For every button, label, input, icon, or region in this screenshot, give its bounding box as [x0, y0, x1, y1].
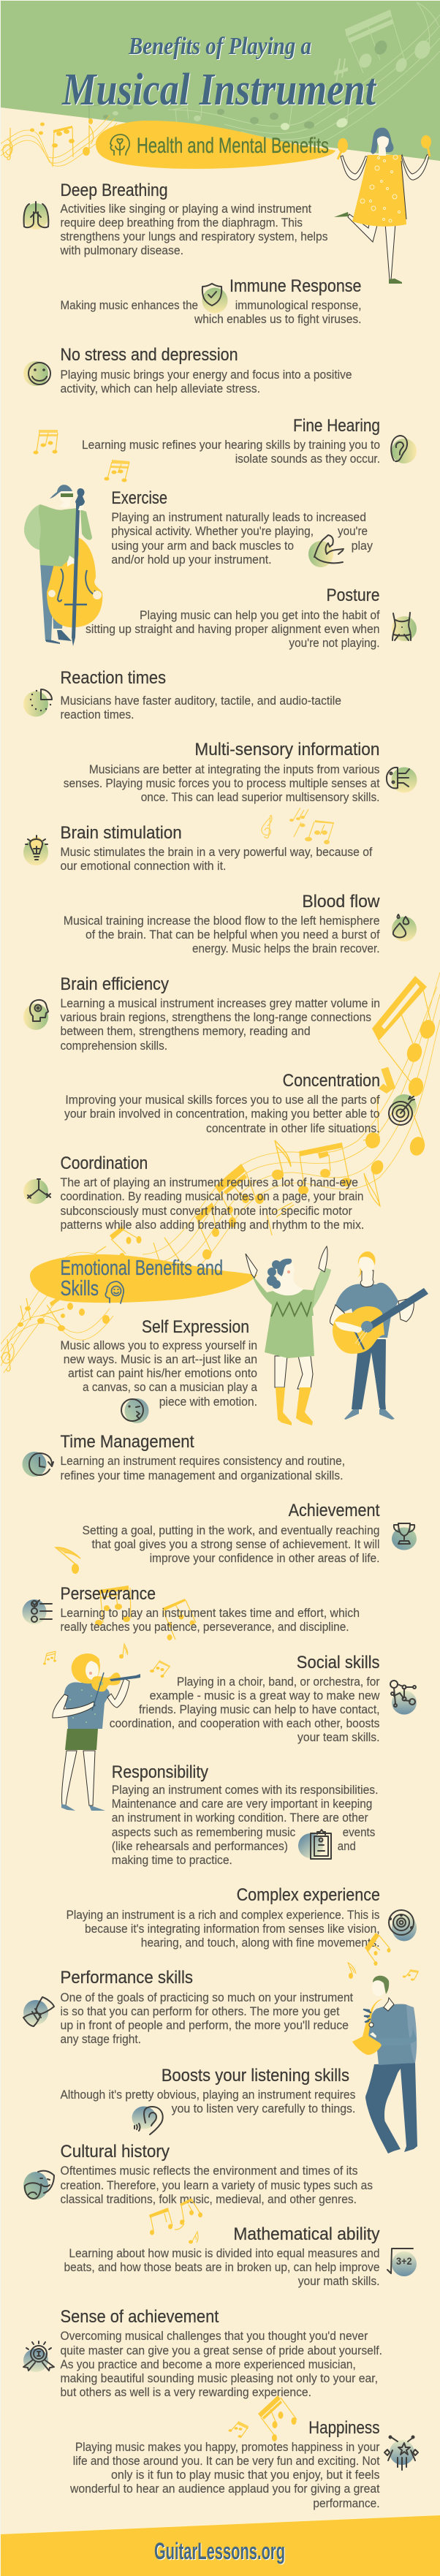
body text [64, 2247, 380, 2288]
body text [60, 2164, 373, 2206]
heading: Performance skills [60, 1968, 193, 1988]
panel: fine hearing [82, 416, 417, 466]
body text: Maintenance and care are very important in keeping [112, 1797, 372, 1811]
title [61, 33, 376, 115]
body text: subconsciously must convert that note into specific motor [60, 1205, 352, 1218]
heading: Blood flow [302, 892, 380, 912]
icon: clipboard [293, 1828, 331, 1863]
body text [60, 299, 361, 326]
panel: performance skills [23, 1968, 353, 2046]
panel: multi-sensory information [64, 740, 417, 804]
panel: reaction times [23, 668, 341, 721]
panel: social skills [110, 1653, 417, 1744]
icon: drops [392, 914, 417, 942]
body text: artist can paint his/her emotions onto [68, 1367, 257, 1380]
body text [60, 1455, 345, 1482]
body text: friends. Playing music can help to have contact, [139, 1703, 380, 1716]
heading: Reaction times [60, 668, 166, 688]
body text: sitting up straight and having proper alignment even when [86, 623, 380, 636]
title: Musical Instrument [61, 65, 376, 115]
body text: new ways. Music is an art--just like an [64, 1353, 257, 1366]
body text: Oftentimes music reflects the environment and times of its [60, 2164, 358, 2178]
banner text: Skills [60, 1277, 99, 1300]
heading: Perseverance [60, 1584, 156, 1604]
body text: you're not playing. [289, 637, 380, 650]
heading: Immune Response [230, 276, 361, 296]
illustration: violinist [53, 1653, 140, 1811]
body text: wonderful to hear an audience applaud you for giving a great [69, 2482, 380, 2496]
body text: physical activity. Whether you're playing, [111, 525, 314, 538]
icon: square root [387, 2249, 417, 2276]
body text: with pulmonary disease. [60, 244, 183, 257]
panel: immune response [60, 276, 361, 326]
icon: ear with sound [132, 2107, 163, 2134]
panel: self expression [60, 1317, 258, 1423]
body text: you're [338, 525, 368, 538]
body text: of the brain. That can be helpful when you need a burst of [86, 928, 380, 942]
icon: three-way branch [23, 1179, 50, 1204]
body text [82, 439, 380, 466]
icon: shield [202, 284, 228, 313]
body text: improve your confidence in other areas of life. [150, 1552, 380, 1565]
body text: Playing music brings your energy and focus into a positive [60, 368, 352, 382]
body text: concentrate in other life situations. [206, 1122, 380, 1135]
body text [111, 511, 373, 567]
heading: Mathematical ability [233, 2224, 380, 2244]
body text: an instrument in working condition. There are other [112, 1811, 368, 1825]
decorative notes: beamed pairs behind perseverance [95, 1586, 196, 1640]
body text: Overcoming musical challenges that you thought you'd never [60, 2330, 368, 2343]
body text [60, 1339, 258, 1409]
icon: ear [391, 436, 417, 463]
heading: Self Expression [142, 1317, 249, 1337]
body text [60, 2088, 355, 2115]
body text: making beautiful sounding music pleasing not only to your ear, [60, 2372, 378, 2385]
body text: your brain involved in concentration, making you better able to [64, 1107, 380, 1121]
decorative notes: above mathematical ability [149, 2198, 202, 2244]
body text: and [338, 1840, 356, 1853]
banner: health and mental benefits [96, 121, 335, 169]
heading: Happiness [308, 2418, 380, 2438]
body text [60, 202, 328, 257]
panel: blood flow [64, 892, 417, 955]
icon: stopwatch [23, 689, 52, 716]
panel: deep breathing [23, 181, 327, 257]
body text: Setting a goal, putting in the work, and eventually reaching [82, 1524, 380, 1537]
body text: making time to practice. [112, 1854, 232, 1867]
heading: Complex experience [237, 1885, 380, 1905]
body text [112, 1784, 379, 1867]
body text: Playing music makes you happy, promotes happiness in your [75, 2441, 380, 2454]
body text: Playing an instrument naturally leads to increased [111, 511, 366, 524]
heading: Time Management [60, 1432, 194, 1452]
body text: Playing music can help you get into the habit of [140, 609, 380, 622]
body text: coordination. By reading musical notes on a page, your brain [60, 1190, 364, 1203]
title: Benefits of Playing a [128, 33, 311, 60]
body text [64, 914, 380, 955]
body text [69, 2441, 380, 2510]
body text [60, 1176, 364, 1232]
body text: Although it's pretty obvious, playing an instrument requires [60, 2088, 355, 2102]
body text: between them, strengthens memory, reading and [60, 1025, 311, 1038]
body text: your math skills. [298, 2275, 380, 2288]
icon: flexed arm [308, 535, 344, 567]
decorative notes under banner [0, 1296, 113, 1371]
icon: kissing face [121, 1398, 149, 1423]
heading: Deep Breathing [60, 181, 168, 200]
body text: that goal gives you a strong sense of achievement. It will [92, 1538, 380, 1551]
body text: Music allows you to express yourself in [60, 1339, 257, 1352]
heading: Social skills [297, 1653, 380, 1672]
icon: fireworks [384, 2436, 418, 2470]
panel: perseverance [22, 1584, 360, 1634]
icon: waist [392, 613, 417, 641]
body text: up in front of people and perform, the more you'll reduce [60, 2019, 349, 2032]
body text: activity, which can help alleviate stress. [60, 382, 260, 395]
heading: Brain stimulation [60, 823, 182, 843]
body text: creation. Therefore, you learn a variety of music types such as [60, 2179, 373, 2192]
panel: posture [86, 586, 417, 650]
body text: quite master can give you a great sense of pride about yourself. [60, 2344, 382, 2357]
body text: Learning to play an instrument takes time and effort, which [60, 1607, 360, 1620]
illustration: guitar man [330, 1251, 428, 1420]
body text: Playing an instrument comes with its responsibilities. [112, 1784, 379, 1797]
icon: network [390, 1681, 417, 1715]
panel: boosts your listening skills [60, 2066, 355, 2134]
body text: Musicians have faster auditory, tactile, and audio-tactile [60, 694, 341, 708]
body text: Learning a musical instrument increases grey matter volume in [60, 997, 380, 1010]
icon: clock [22, 1452, 53, 1477]
body text: patterns while also adding breathing and rhythm to the mix. [60, 1219, 364, 1232]
banner: health and mental benefits: Health and Mental Benefits [137, 134, 329, 158]
heading: No stress and depression [60, 345, 238, 365]
body text: senses. Playing music forces you to process multiple senses at [64, 777, 380, 790]
panel: coordination [23, 1153, 364, 1232]
icon: trophy [392, 1523, 417, 1550]
heading: Exercise [111, 488, 167, 508]
panel: time management [22, 1432, 345, 1482]
panel: happiness [69, 2418, 418, 2510]
heading: Coordination [60, 1153, 148, 1173]
panel: concentration [64, 1071, 417, 1135]
illustration: double bass player [24, 485, 102, 646]
heading: Brain efficiency [60, 974, 169, 994]
body text: One of the goals of practicing so much on your instrument [60, 1991, 353, 2004]
decorative notes: above saxophonist [348, 1933, 419, 1981]
green header background [1, 1, 440, 161]
body text: any stage fright. [60, 2033, 141, 2046]
panel: no stress and depression [23, 345, 352, 395]
decorative note: small beamed 2 [104, 460, 129, 482]
banner text [60, 1257, 223, 1300]
heading: Boosts your listening skills [162, 2066, 349, 2086]
body text [60, 846, 373, 873]
banner: emotional benefits and skills [30, 1254, 257, 1303]
panel: mathematical ability [64, 2224, 417, 2288]
body text [60, 2330, 382, 2399]
decorative yellow notes, left of banner [0, 115, 117, 167]
body text [60, 997, 380, 1053]
panel: achievement [82, 1501, 417, 1565]
body text: a canvas, so can a musician play a [83, 1381, 258, 1394]
illustration: woman with maracas [334, 128, 431, 284]
panel: cultural history [23, 2142, 373, 2206]
footer band [0, 2515, 440, 2576]
body text: piece with emotion. [159, 1395, 257, 1409]
body text [60, 1991, 353, 2046]
heading: Sense of achievement [60, 2307, 219, 2327]
icon: lungs [23, 202, 48, 230]
icon: target with arrow [389, 1094, 417, 1125]
body text: Making music enhances the [60, 299, 198, 312]
body text [86, 609, 380, 650]
body text [67, 1909, 379, 1950]
body text: example - music is a great way to make new [150, 1689, 380, 1702]
body text: our emotional connection with it. [60, 860, 226, 873]
icon: smiley [23, 361, 50, 386]
body text: once. This can lead superior multisensory skills. [141, 791, 379, 804]
heading: Fine Hearing [293, 416, 380, 436]
panel: responsibility [112, 1762, 379, 1867]
heading: Achievement [289, 1501, 380, 1520]
illustration: dancing woman [246, 1246, 331, 1425]
body text: events [343, 1826, 375, 1839]
decorative notes: clef and beamed [262, 808, 334, 844]
heading: Posture [326, 586, 380, 605]
body text: comprehension skills. [60, 1039, 167, 1053]
body text [60, 368, 352, 395]
body text: The art of playing an instrument requires a lot of hand-eye [60, 1176, 358, 1189]
icon: square root: 3+2 [396, 2255, 412, 2267]
body text: strengthens your lungs and respiratory system, helps [60, 230, 327, 243]
body text: aspects such as remembering music [112, 1826, 295, 1839]
icon: theatre masks [23, 2171, 54, 2200]
heading: Responsibility [112, 1762, 208, 1782]
body text: Music stimulates the brain in a very powerful way, because of [60, 846, 373, 859]
body text: Activities like singing or playing a wind instrument [60, 202, 311, 216]
body text: is so that you can perform for others. The more you get [60, 2005, 340, 2018]
body text [60, 694, 341, 721]
heading: Concentration [283, 1071, 380, 1091]
body text: you to listen very carefully to things. [172, 2102, 355, 2115]
body text: reaction times. [60, 708, 134, 721]
icon: orbit [389, 1910, 417, 1942]
icon: rosette [23, 2341, 54, 2372]
body text: classical traditions, folk music, medieval, and other genres. [60, 2193, 357, 2206]
icon: head with gear [23, 1000, 48, 1030]
heading: Multi-sensory information [194, 740, 380, 759]
body text: Learning music refines your hearing skills by training you to [82, 439, 380, 452]
panel: sense of achievement [23, 2307, 382, 2399]
body text: only is it fun to play music that you enjoy, but it feels [111, 2469, 380, 2482]
body text: As you practice and become a more experienced musician, [60, 2358, 356, 2371]
body text: immunological response, [235, 299, 361, 312]
body text: Musicians are better at integrating the inputs from various [89, 763, 379, 776]
banner text: Emotional Benefits and [60, 1257, 223, 1280]
decorative note: small beamed [34, 430, 58, 455]
body text: performance. [313, 2497, 380, 2510]
body text: using your arm and back muscles to [111, 539, 294, 553]
decorative note: eighth note [56, 1548, 80, 1574]
body text: really teaches you patience, perseverance, and discipline. [60, 1621, 349, 1634]
icon: light bulb brain [23, 836, 48, 865]
heading: Cultural history [60, 2142, 170, 2162]
icon: circuit brain [387, 768, 417, 792]
body text: Playing in a choir, band, or orchestra, for [177, 1675, 380, 1689]
body text: coordination, and cooperation with each other, boosts [110, 1717, 379, 1730]
body text: but others as well is a very rewarding experience. [60, 2386, 311, 2399]
icon: smiling head [105, 1281, 124, 1303]
body text [64, 763, 380, 804]
body text: Learning an instrument requires consistency and routine, [60, 1455, 345, 1468]
body text: because it's integrating information from senses like vision, [85, 1922, 380, 1936]
icon: checklist [22, 1599, 52, 1624]
body text: Playing an instrument is a rich and complex experience. This is [67, 1909, 379, 1922]
body text: play [352, 539, 373, 553]
body text: beats, and how those beats are in broken up, can help improve [64, 2261, 380, 2274]
body text [60, 1607, 360, 1634]
body text [82, 1524, 380, 1565]
body text: Improving your musical skills forces you to use all the parts of [65, 1094, 380, 1107]
body text [64, 1094, 380, 1135]
body text: hearing, and touch, along with fine movements. [141, 1936, 379, 1950]
footer brand: GuitarLessons.org [154, 2538, 285, 2564]
decorative notes: small near violinist [43, 1644, 170, 1678]
panel: brain stimulation [23, 823, 373, 873]
body text: energy. Music helps the brain recover. [192, 942, 380, 955]
panel: complex experience [67, 1885, 417, 1950]
icon: head with heart [110, 135, 129, 155]
decorative notes on header [88, 2, 440, 145]
body text: require deep breathing from the diaphragm. This [60, 216, 303, 230]
panel: brain efficiency [23, 974, 380, 1053]
body text: various brain regions, strengthens the long-range connections [60, 1011, 371, 1024]
panel: exercise [111, 488, 373, 567]
body text: life and those around you. It can be very fun and exciting. Not [73, 2455, 380, 2468]
icon: bow tie [23, 1997, 54, 2026]
body text: Learning about how music is divided into equal measures and [69, 2247, 380, 2260]
body text: which enables us to fight viruses. [194, 313, 361, 326]
decorative notes: above happiness [228, 2395, 297, 2441]
body text: isolate sounds as they occur. [235, 452, 380, 466]
decorative notes: big yellow staff sweeping across [0, 972, 440, 1373]
illustration: saxophonist [352, 1976, 417, 2153]
body text: refines your time management and organizational skills. [60, 1469, 344, 1482]
body text [110, 1675, 380, 1744]
body text: your team skills. [297, 1731, 380, 1744]
body text: (like rehearsals and performances) [112, 1840, 288, 1853]
body text: and/or hold up your instrument. [111, 553, 272, 567]
body text: Musical training increase the blood flow to the left hemisphere [64, 914, 380, 928]
